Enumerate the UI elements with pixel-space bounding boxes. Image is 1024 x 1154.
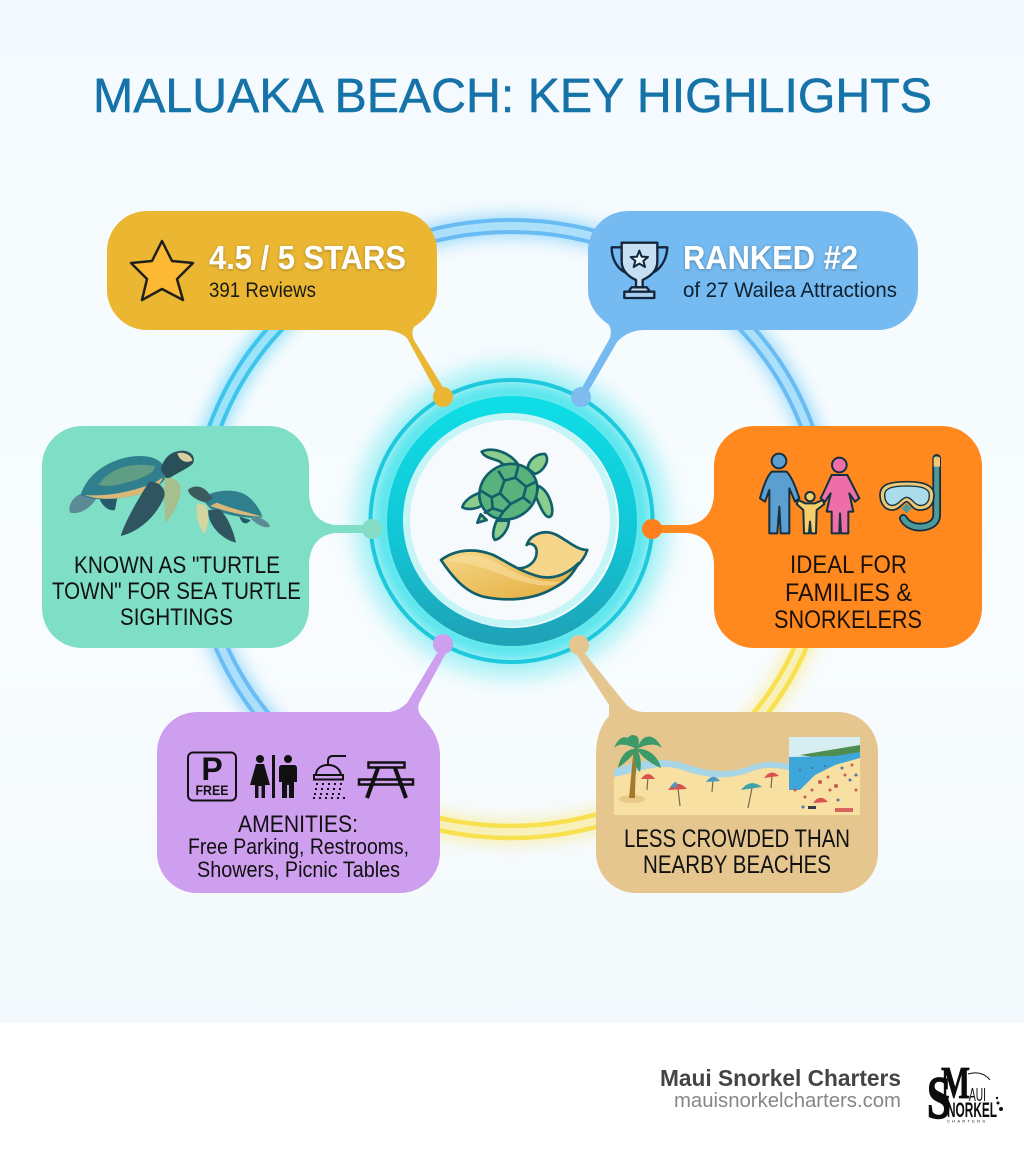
logo: M (941, 1057, 970, 1108)
icon: trophy (612, 243, 667, 298)
text: amenities: Free Parking, Restrooms, (188, 834, 409, 859)
icon: family (760, 454, 859, 533)
icon: picnic table (359, 762, 413, 798)
panel: families (642, 426, 982, 648)
text: families (774, 551, 922, 634)
icon: free parking: FREE (196, 782, 228, 798)
icon: sea turtle (462, 450, 552, 540)
text: attractions: of 27 Wailea Attractions (683, 279, 897, 302)
icon: star (131, 241, 193, 300)
icon: sea turtles (69, 451, 270, 543)
logo: AUI (969, 1085, 986, 1105)
text: turtle town: KNOWN AS "TURTLE (74, 552, 280, 579)
footer brand text (660, 1065, 901, 1112)
text: reviews: 391 Reviews (209, 279, 316, 302)
text: less crowded (624, 825, 850, 879)
logo: CHARTERS (947, 1118, 985, 1124)
illustration: beach scene (614, 735, 860, 815)
callout shape: families (652, 426, 982, 648)
icon: free parking (188, 751, 236, 800)
footer brand text: Maui Snorkel Charters (660, 1065, 901, 1091)
callout shape: ranking (579, 211, 918, 397)
title: MALUAKA BEACH: KEY HIGHLIGHTS (93, 70, 932, 123)
icon: restrooms (250, 755, 297, 798)
connector dot: rating (433, 387, 453, 407)
icon: snorkel mask (880, 457, 940, 527)
text: amenities (188, 811, 409, 882)
central medallion (366, 375, 658, 667)
connector dot: amenities (433, 634, 453, 654)
outer double ring (191, 220, 831, 838)
text: turtle town (52, 552, 301, 631)
icon: shower (313, 756, 346, 798)
footer band (0, 1023, 1024, 1154)
logo: S (927, 1065, 951, 1131)
callout shape: turtle town (42, 426, 372, 648)
connector dot: families (642, 519, 662, 539)
connector dot: ranking (571, 387, 591, 407)
text: families: SNORKELERS (774, 606, 922, 634)
panel: less crowded (569, 635, 878, 893)
logo (927, 1057, 1003, 1131)
footer brand text: mauisnorkelcharters.com (674, 1090, 901, 1112)
heading: ranking: RANKED #2 (683, 239, 858, 276)
text: families: FAMILIES & (785, 579, 912, 607)
callout shape: less crowded (575, 650, 878, 893)
text: amenities: AMENITIES: (238, 811, 358, 838)
connector dot: turtle town (362, 519, 382, 539)
illustration: crowded beach inset (789, 737, 860, 815)
text: less crowded: LESS CROWDED THAN (624, 825, 850, 853)
panel: ranking (571, 211, 918, 407)
panel: turtle town (42, 426, 382, 648)
callout shape: amenities (157, 650, 446, 893)
text: families: IDEAL FOR (790, 551, 907, 579)
callout shape: rating (107, 211, 446, 397)
text: turtle town: SIGHTINGS (120, 604, 233, 631)
panel: rating (107, 211, 453, 407)
icon: golden wave (441, 532, 587, 599)
text: less crowded: NEARBY BEACHES (643, 851, 831, 879)
connector dot: less crowded (569, 635, 589, 655)
icon: free parking: P (201, 751, 223, 787)
heading: rating: 4.5 / 5 STARS (209, 239, 406, 276)
text: turtle town: TOWN" FOR SEA TURTLE (52, 578, 301, 605)
text: amenities: Showers, Picnic Tables (197, 857, 400, 882)
panel: amenities (157, 634, 453, 893)
